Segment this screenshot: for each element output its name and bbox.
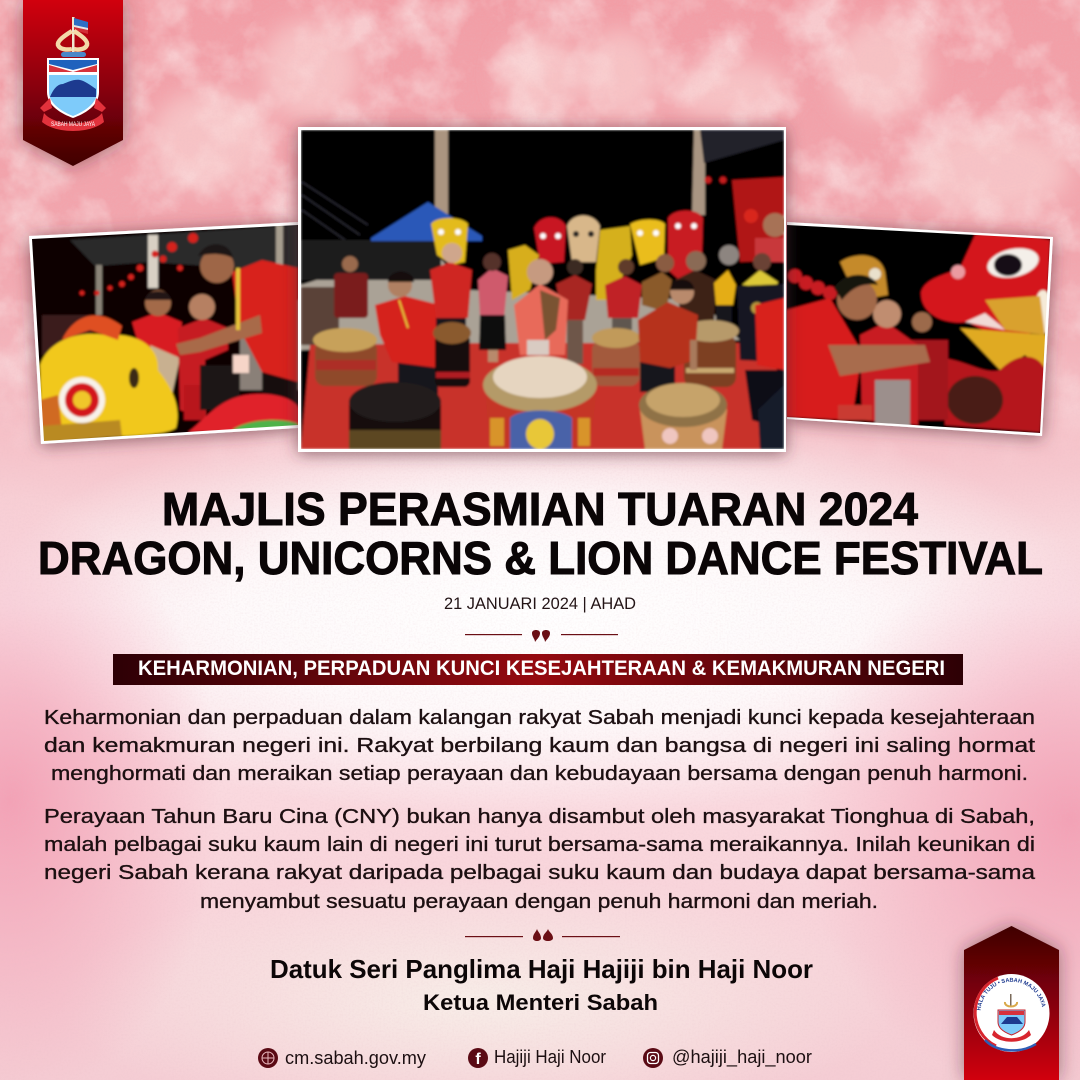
icon: Hala Tuju Sabah Maju Jaya emblem [974, 974, 1050, 1052]
icon: Hala Tuju Sabah Maju Jaya emblem: HALA TUJU • SABAH MAJU JAYA [976, 978, 1046, 1010]
sub: woman in pink [478, 253, 508, 362]
sub: man in red shirt [176, 244, 298, 410]
date: 21 JANUARI 2024 | AHAD [444, 594, 636, 613]
sub: drum back right [683, 320, 739, 387]
sub: drum front right [639, 383, 727, 449]
sub: bald man [178, 294, 240, 420]
social: facebook: Hajiji Haji Noor [494, 1047, 606, 1067]
sub: red lion head [921, 234, 1052, 370]
photo: left, officials dotting the yellow lion [20, 215, 305, 450]
text block: paragraph two [44, 805, 1036, 913]
sub: drum back left [313, 328, 377, 386]
icon: Sabah crest: SABAH MAJU JAYA [51, 121, 95, 128]
text block: paragraph two: malah pelbagai suku kaum lain di negeri ini turut bersama-sama meraikannya. Inilah keunikan di [44, 833, 1035, 856]
social: facebook: f [475, 1051, 481, 1068]
signatory name: Datuk Seri Panglima Haji Hajiji bin Haji Noor [270, 954, 813, 984]
sub: drum back black [433, 322, 471, 387]
sub: man in red front right [638, 280, 698, 392]
sub: man in red shirt behind [430, 243, 472, 330]
sub: bald man [860, 300, 918, 426]
icon: Sabah crest [40, 17, 106, 131]
sub: blue tent [371, 202, 482, 241]
text block: paragraph one: menghormati dan meraikan setiap perayaan dan kebudayaan bersama dengan penuh harmoni. [51, 762, 1028, 785]
sub: person at far right [745, 298, 784, 430]
sub: man in red shirt with lanyard [375, 272, 440, 408]
social: website: cm.sabah.gov.my [285, 1048, 426, 1068]
signatory role: Ketua Menteri Sabah [423, 990, 658, 1015]
title: DRAGON, UNICORNS & LION DANCE FESTIVAL [38, 532, 1043, 584]
sub: women in yellow and podium [714, 245, 784, 362]
sub: drum front black [349, 382, 441, 449]
text block: paragraph two: menyambut sesuatu perayaan dengan penuh harmoni dan meriah. [200, 890, 878, 913]
text block: paragraph one [44, 706, 1035, 785]
ribbon: top left with state crest [23, 0, 123, 166]
text block: paragraph one: dan kemakmuran negeri ini. Rakyat berbilang kaum dan bangsa di negeri ini saling hormat [44, 734, 1035, 757]
sub: yellow lion behind [840, 255, 888, 300]
sub: drum middle [592, 328, 640, 386]
sub: red lion body [942, 357, 1045, 432]
social: instagram: @hajiji_haji_noor [672, 1047, 812, 1068]
photo: centre, gimik drum ceremony [298, 127, 787, 452]
sub: guest of honour [514, 259, 568, 362]
photo: right, officials dotting the red lion [780, 215, 1060, 440]
sub: yellow lion [40, 315, 178, 443]
title: MAJLIS PERASMIAN TUARAN 2024 [162, 483, 918, 535]
sub: red backdrop [704, 176, 787, 262]
sub: man with glasses [132, 290, 182, 395]
sub: drum front centre [483, 356, 597, 449]
text block: paragraph two: Perayaan Tahun Baru Cina (CNY) bukan hanya disambut oleh masyarakat Tionghua di Sabah, [44, 805, 1035, 828]
divider: closing quote [465, 929, 620, 941]
divider: opening quote [465, 630, 618, 642]
text block: paragraph two: negeri Sabah kerana rakyat daripada pelbagai suku kaum dan budaya dapat bersama-sama [44, 861, 1036, 884]
sub: men in red at back [556, 251, 716, 364]
ribbon: bottom right with emblem [952, 917, 1072, 1080]
sub: lion dance heads [431, 210, 703, 300]
sub: man back left, floral shirt [334, 256, 368, 318]
sub: red lion at bottom [188, 394, 300, 432]
sub: woman behind [908, 312, 948, 420]
sub: man in red shirt [786, 275, 930, 420]
title [38, 483, 1043, 584]
sub: drum far right [758, 385, 784, 449]
heading banner: KEHARMONIAN, PERPADUAN KUNCI KESEJAHTERAAN & KEMAKMURAN NEGERI [138, 657, 945, 680]
text block: paragraph one: Keharmonian dan perpaduan dalam kalangan rakyat Sabah menjadi kunci kepada kesejahteraan [44, 706, 1035, 729]
